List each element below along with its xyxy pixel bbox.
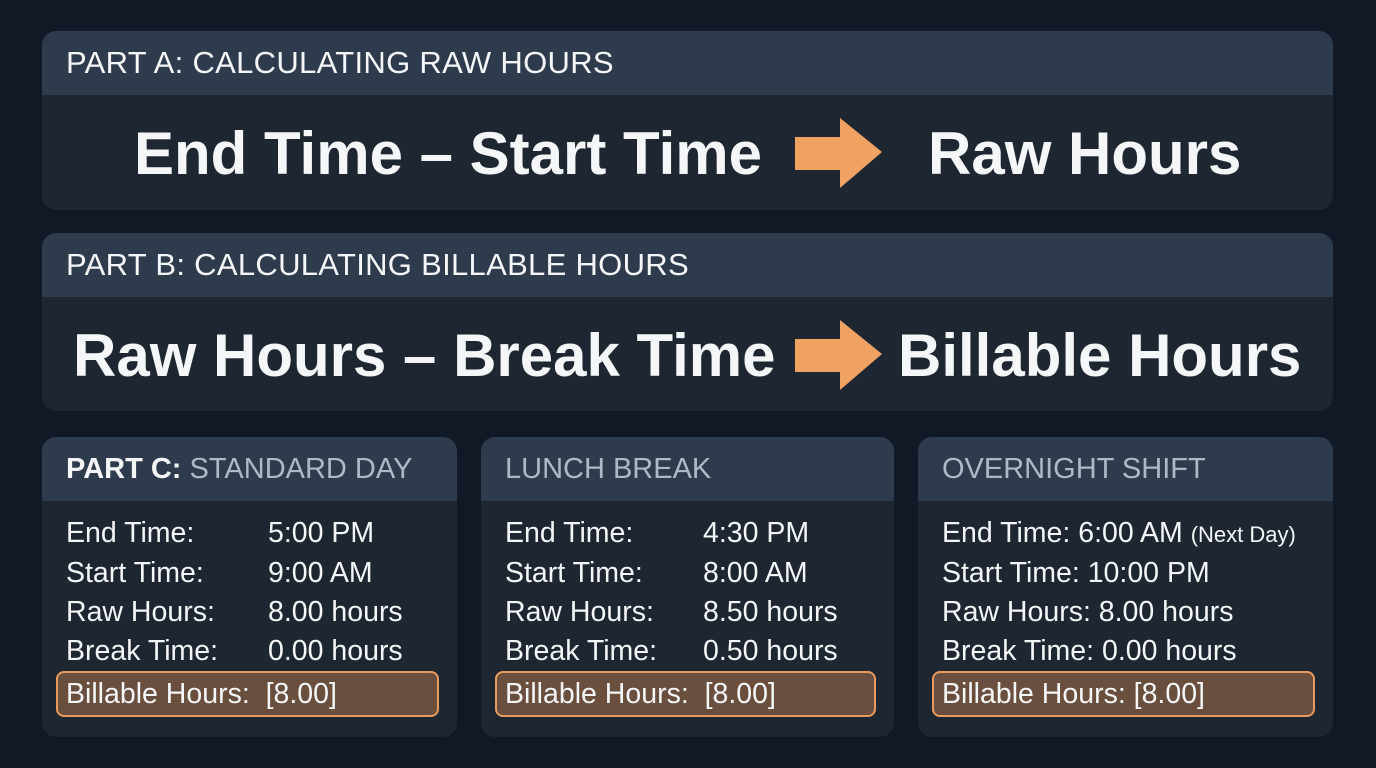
rows: 8:00 AM xyxy=(703,557,808,589)
billable result box: Billable Hours: [8.00] xyxy=(66,678,337,710)
panel: lunch break xyxy=(481,437,894,737)
heading: part A: PART A: CALCULATING RAW HOURS xyxy=(66,45,614,80)
billable result box xyxy=(495,671,876,717)
arrow xyxy=(795,320,882,390)
heading: overnight shift: OVERNIGHT SHIFT xyxy=(942,452,1206,484)
billable result box: Billable Hours: [8.00] xyxy=(505,678,776,710)
panel: part B xyxy=(42,233,1333,411)
rows xyxy=(942,517,1296,667)
formula result: billable hours: Billable Hours xyxy=(898,322,1301,389)
panel: overnight shift xyxy=(918,437,1333,737)
rows: End Time: xyxy=(66,517,194,549)
billable result box xyxy=(56,671,439,717)
rows: Raw Hours: xyxy=(66,596,215,628)
rows: Start Time: xyxy=(66,557,204,589)
heading: part C standard day: PART C: xyxy=(66,452,181,484)
rows: Break Time: xyxy=(66,635,218,667)
panel: standard day xyxy=(42,437,457,737)
rows: 5:00 PM xyxy=(268,517,374,549)
rows xyxy=(505,517,838,667)
formula: raw minus break: Raw Hours – Break Time xyxy=(73,322,776,389)
rows: 0.00 hours xyxy=(268,635,403,667)
rows: Start Time: 10:00 PM xyxy=(942,557,1210,589)
heading: lunch break xyxy=(481,437,894,501)
billable result box: Billable Hours: [8.00] xyxy=(942,678,1205,710)
rows xyxy=(66,517,403,667)
panel: part A xyxy=(42,31,1333,210)
heading: part B: PART B: CALCULATING BILLABLE HOURS xyxy=(66,247,689,282)
formula result: raw hours: Raw Hours xyxy=(928,120,1241,187)
rows: 8.50 hours xyxy=(703,596,838,628)
rows: 9:00 AM xyxy=(268,557,373,589)
rows: Start Time: xyxy=(505,557,643,589)
rows: End Time: 6:00 AM (Next Day) xyxy=(942,517,1296,549)
formula: end minus start: End Time – Start Time xyxy=(134,120,762,187)
heading: lunch break: LUNCH BREAK xyxy=(505,452,711,484)
rows: 8.00 hours xyxy=(268,596,403,628)
heading: part C standard day xyxy=(42,437,457,501)
heading: part B xyxy=(42,233,1333,297)
rows: Raw Hours: 8.00 hours xyxy=(942,596,1233,628)
rows: 0.50 hours xyxy=(703,635,838,667)
arrow xyxy=(795,118,882,188)
heading: overnight shift xyxy=(918,437,1333,501)
heading: part C standard day: STANDARD DAY xyxy=(190,452,412,484)
heading: part A xyxy=(42,31,1333,95)
rows: 4:30 PM xyxy=(703,517,809,549)
rows: Break Time: 0.00 hours xyxy=(942,635,1237,667)
billable result box xyxy=(932,671,1315,717)
rows: Raw Hours: xyxy=(505,596,654,628)
rows: End Time: xyxy=(505,517,633,549)
rows: Break Time: xyxy=(505,635,657,667)
